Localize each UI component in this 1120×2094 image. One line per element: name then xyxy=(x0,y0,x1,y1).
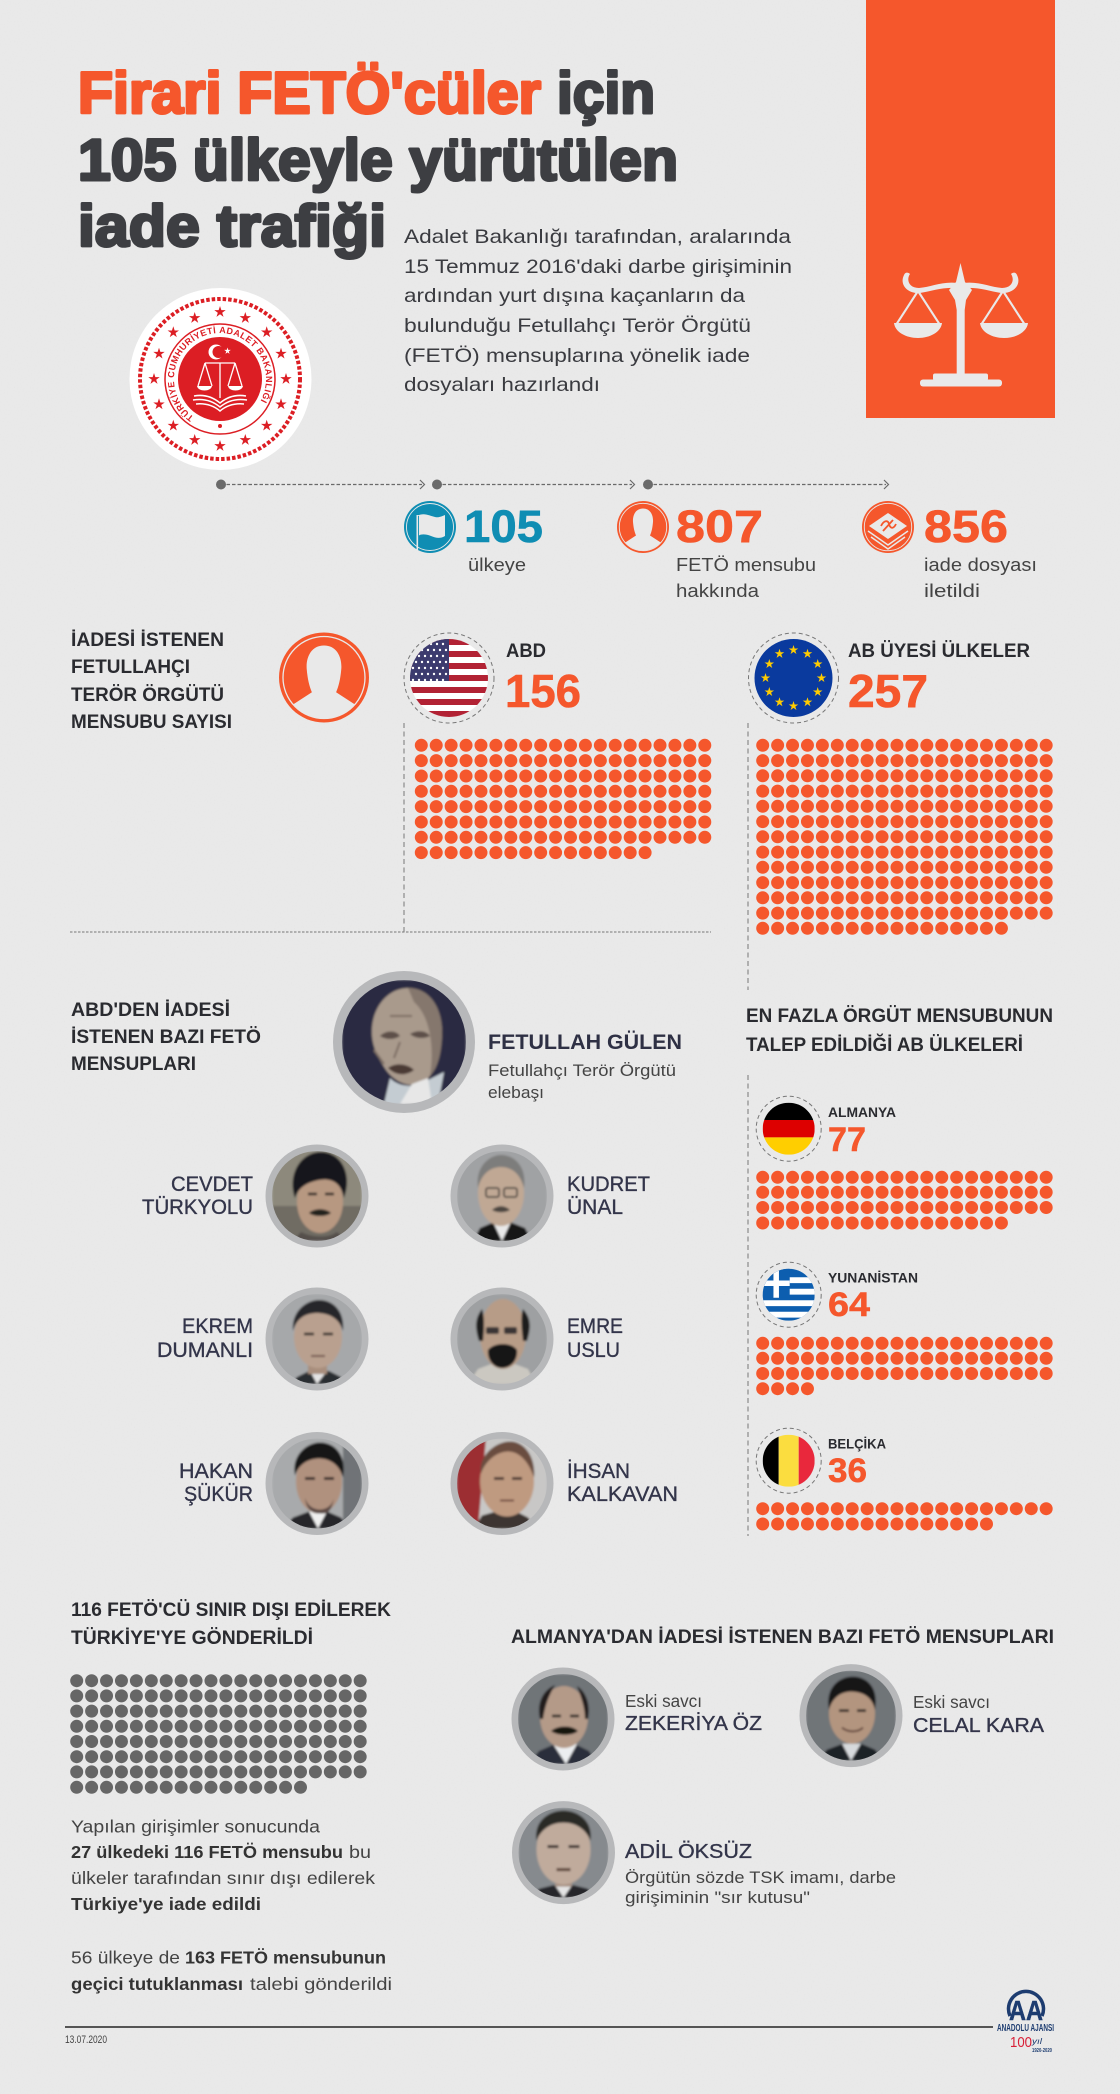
stat: 807 members: hakkında xyxy=(676,581,760,601)
panel: Greece: YUNANİSTAN xyxy=(828,1270,918,1286)
heading: top EU countries: EN FAZLA ÖRGÜT MENSUBUNUN xyxy=(746,1006,1053,1027)
portrait: İhsan Kalkavan xyxy=(450,1432,554,1535)
icon: US flag xyxy=(404,633,494,723)
panel: USA: 156 xyxy=(505,665,581,717)
panel: Germany: 77 xyxy=(828,1121,866,1159)
logo: Anadolu Ajansı: 1920-2020 xyxy=(1032,2048,1052,2054)
intro text: ardından yurt dışına kaçanların da xyxy=(404,285,745,307)
person: Cevdet Türkyolu xyxy=(142,1144,368,1248)
person: Zekeriya Öz: ZEKERİYA ÖZ xyxy=(625,1712,762,1735)
icon: German flag xyxy=(756,1096,821,1161)
heading: number of wanted members: MENSUBU SAYISI xyxy=(71,712,232,733)
icon: documents xyxy=(862,501,914,553)
footer rule xyxy=(65,2026,993,2028)
dot chart: Germany 77 xyxy=(763,1177,1047,1223)
portrait: Hakan Şükür xyxy=(266,1432,368,1535)
person: İhsan Kalkavan xyxy=(450,1432,678,1535)
portrait: Ekrem Dumanlı xyxy=(266,1288,368,1390)
heading: 116 deported xyxy=(71,1600,391,1649)
icon: Belgian flag xyxy=(756,1428,821,1493)
text block: deportation summary xyxy=(71,1816,392,1994)
stat: 856 files: 856 xyxy=(924,501,1008,552)
person: Adil Öksüz: ADİL ÖKSÜZ xyxy=(625,1840,752,1863)
person: Cevdet Türkyolu: CEVDET xyxy=(171,1173,253,1196)
heading: wanted from USA: MENSUPLARI xyxy=(71,1054,196,1075)
panel: Belgium: 36 xyxy=(828,1452,867,1490)
person: İhsan Kalkavan: KALKAVAN xyxy=(567,1483,678,1506)
panel: EU: AB ÜYESİ ÜLKELER xyxy=(848,641,1030,662)
person: Kudret Ünal: ÜNAL xyxy=(567,1196,623,1219)
icon: EU flag xyxy=(748,633,838,723)
intro text xyxy=(404,226,792,396)
panel: Belgium xyxy=(756,1428,1047,1524)
icon: person xyxy=(617,501,669,553)
dot chart: Belgium 36 xyxy=(763,1509,1047,1524)
dot chart: deported members xyxy=(77,1681,361,1787)
person: Celal Kara: CELAL KARA xyxy=(913,1714,1044,1737)
intro text: 15 Temmuz 2016'daki darbe girişiminin xyxy=(404,256,792,278)
person: Celal Kara: Eski savcı xyxy=(913,1692,990,1712)
text block: deportation summary: Yapılan girişimler sonucunda xyxy=(71,1816,320,1836)
stat: 856 files: iade dosyası xyxy=(924,555,1037,575)
name: Fetullah Gülen: elebaşı xyxy=(488,1083,544,1102)
stat: 105 countries xyxy=(404,501,543,575)
heading: top EU countries xyxy=(746,1006,1053,1056)
heading: top EU countries: TALEP EDİLDİĞİ AB ÜLKELERİ xyxy=(746,1034,1023,1056)
title: Firari FETÖ'cüler xyxy=(78,61,541,126)
stat: 807 members: 807 xyxy=(676,501,763,552)
stat: 105 countries: ülkeye xyxy=(468,555,526,575)
person: Adil Öksüz: girişiminin "sır kutusu" xyxy=(625,1888,810,1907)
text block: deportation summary: talebi gönderildi xyxy=(250,1974,392,1994)
text block: deportation summary: ülkeler tarafından sınır dışı edilerek xyxy=(71,1868,375,1888)
panel: Greece: 64 xyxy=(828,1286,870,1324)
panel: Greece xyxy=(756,1262,1047,1389)
person: Emre Uslu: USLU xyxy=(567,1339,620,1362)
intro text: dosyaları hazırlandı xyxy=(404,374,600,396)
heading: wanted from USA: İSTENEN BAZI FETÖ xyxy=(71,1027,261,1048)
person: Ekrem Dumanlı xyxy=(157,1288,368,1390)
panel: USA: ABD xyxy=(506,641,546,662)
dot chart: USA 156 xyxy=(421,745,705,853)
text block: deportation summary: Türkiye'ye iade edildi xyxy=(71,1894,261,1914)
person: Zekeriya Öz xyxy=(512,1668,762,1770)
person: Hakan Şükür: HAKAN xyxy=(179,1460,253,1483)
heading: wanted from USA xyxy=(71,1000,261,1075)
panel: EU: 257 xyxy=(848,665,928,717)
icon: scales of justice xyxy=(894,263,1028,386)
person: Zekeriya Öz: Eski savcı xyxy=(625,1691,702,1711)
text block: deportation summary: 27 ülkedeki 116 FETÖ mensubu xyxy=(71,1842,343,1862)
panel: EU xyxy=(748,633,1047,928)
heading: number of wanted members xyxy=(71,630,232,733)
title: iade trafiği xyxy=(78,194,386,259)
person: Kudret Ünal: KUDRET xyxy=(567,1173,650,1196)
divider lines xyxy=(70,723,748,1536)
person: Cevdet Türkyolu: TÜRKYOLU xyxy=(142,1196,253,1219)
portrait: Celal Kara xyxy=(800,1664,902,1767)
logo: Anadolu Ajansı: ANADOLU AJANSI xyxy=(997,2023,1054,2034)
portrait: Emre Uslu xyxy=(450,1288,554,1390)
heading: wanted from Germany: ALMANYA'DAN İADESİ İSTENEN BAZI FETÖ MENSUPLARI xyxy=(511,1627,1054,1648)
panel: orange banner with scales icon xyxy=(866,0,1055,418)
text block: deportation summary: geçici tutuklanması xyxy=(71,1974,243,1994)
panel: Belgium: BELÇİKA xyxy=(828,1436,886,1452)
person: Ekrem Dumanlı: EKREM xyxy=(182,1315,253,1338)
logo: Anadolu Ajansı: yıl xyxy=(1031,2037,1042,2046)
heading: number of wanted members: FETULLAHÇI xyxy=(71,657,190,678)
person: Ekrem Dumanlı: DUMANLI xyxy=(157,1339,253,1362)
icon: large person xyxy=(279,632,369,722)
stat: 105 countries: 105 xyxy=(464,501,543,552)
icon: Greek flag xyxy=(756,1262,821,1327)
portrait: Fetullah Gülen xyxy=(333,971,475,1113)
text block: deportation summary: 163 FETÖ mensubunun xyxy=(185,1948,386,1968)
date: 13.07.2020 xyxy=(65,2034,107,2046)
portrait: Kudret Ünal xyxy=(450,1144,554,1248)
stat: 856 files: iletildi xyxy=(924,581,980,601)
logo: Anadolu Ajansı: 100 xyxy=(1010,2034,1032,2051)
text block: deportation summary: 56 ülkeye de xyxy=(71,1948,180,1968)
stat: 807 members: FETÖ mensubu xyxy=(676,555,816,575)
heading: number of wanted members: İADESİ İSTENEN xyxy=(71,630,224,651)
portrait: Adil Öksüz xyxy=(512,1801,615,1904)
name: Fetullah Gülen: FETULLAH GÜLEN xyxy=(488,1029,682,1054)
logo: Anadolu Ajansı xyxy=(997,1991,1054,2054)
icon: flag xyxy=(404,501,456,553)
dot chart: EU 257 xyxy=(763,745,1047,928)
person: Emre Uslu xyxy=(450,1288,623,1390)
person: Adil Öksüz: Örgütün sözde TSK imamı, darbe xyxy=(625,1868,896,1887)
logo: Anadolu Ajansı: AA xyxy=(1009,1995,1043,2026)
intro text: Adalet Bakanlığı tarafından, aralarında xyxy=(404,226,791,248)
title xyxy=(78,61,678,259)
heading: number of wanted members: TERÖR ÖRGÜTÜ xyxy=(71,685,224,706)
panel: USA xyxy=(404,633,705,853)
person: Emre Uslu: EMRE xyxy=(567,1315,623,1338)
person: Celal Kara xyxy=(800,1664,1044,1767)
heading: 116 deported: 116 FETÖ'CÜ SINIR DIŞI EDİLEREK xyxy=(71,1600,391,1621)
icon: ministry of justice seal xyxy=(130,288,312,470)
person: Hakan Şükür: ŞÜKÜR xyxy=(184,1483,253,1506)
text block: deportation summary: bu xyxy=(349,1842,371,1862)
title: için xyxy=(557,61,655,126)
intro text: bulunduğu Fetullahçı Terör Örgütü xyxy=(404,315,751,337)
timeline arrows xyxy=(216,480,888,490)
portrait: Zekeriya Öz xyxy=(512,1668,614,1770)
person: İhsan Kalkavan: İHSAN xyxy=(567,1460,630,1483)
heading: 116 deported: TÜRKİYE'YE GÖNDERİLDİ xyxy=(71,1628,313,1649)
intro text: (FETÖ) mensuplarına yönelik iade xyxy=(404,345,750,367)
person: Adil Öksüz xyxy=(512,1801,896,1907)
person: Kudret Ünal xyxy=(450,1144,650,1248)
title: 105 ülkeyle yürütülen xyxy=(78,128,678,193)
icon: ministry of justice seal: TÜRKİYE CUMHURİYETİ ADALET BAKANLIĞI xyxy=(168,326,272,422)
stat: 856 files xyxy=(862,501,1037,601)
panel: Germany: ALMANYA xyxy=(828,1104,896,1120)
heading: wanted from USA: ABD'DEN İADESİ xyxy=(71,1000,230,1021)
stat: 807 members xyxy=(617,501,816,601)
name: Fetullah Gülen: Fetullahçı Terör Örgütü xyxy=(488,1061,676,1080)
name: Fetullah Gülen xyxy=(488,1029,682,1102)
dot chart: Greece 64 xyxy=(763,1343,1047,1389)
person: Hakan Şükür xyxy=(179,1432,368,1535)
portrait: Cevdet Türkyolu xyxy=(266,1144,368,1248)
panel: Germany xyxy=(756,1096,1047,1223)
